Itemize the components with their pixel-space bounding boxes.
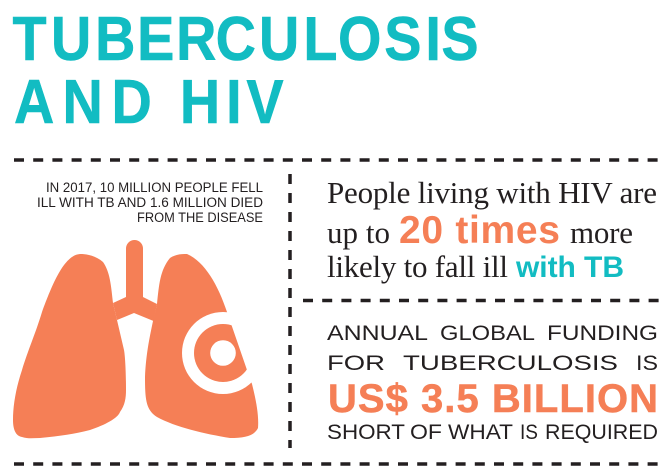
text: 20 times more likely: more (570, 215, 633, 250)
text: funding gap (327, 321, 658, 444)
text: funding gap: OF (410, 420, 442, 444)
text: TB statistics 2017: FROM THE DISEASE (137, 210, 263, 225)
text: funding gap: US$ 3.5 BILLION (328, 377, 658, 421)
TB target orange ring (194, 324, 252, 382)
text: TB statistics 2017: ILL WITH TB AND 1.6 MILLION DIED (37, 195, 263, 210)
icon: lungs with TB target (13, 240, 264, 438)
text: 20 times more likely: People living with HIV are (327, 175, 657, 210)
text: funding gap: GLOBAL (440, 321, 535, 345)
text: funding gap: IS (520, 420, 538, 444)
text: 20 times more likely: with TB (515, 251, 624, 284)
title: AND HIV (14, 68, 284, 137)
text: funding gap: ANNUAL (327, 321, 428, 345)
text: funding gap: SHORT (327, 420, 405, 444)
TB target centre (210, 340, 236, 366)
text: 20 times more likely: likely to fall ill (327, 249, 508, 284)
text: funding gap: TUBERCULOSIS (403, 351, 618, 375)
TB target white ring (182, 312, 264, 394)
text: funding gap: REQUIRED (545, 420, 658, 444)
text: TB statistics 2017 (37, 180, 263, 225)
text: funding gap: FUNDING (547, 321, 658, 345)
text: TB statistics 2017: IN 2017, 10 MILLION PEOPLE FELL (46, 180, 263, 195)
title: TUBERCULOSIS (12, 5, 479, 74)
text: funding gap: FOR (327, 351, 385, 375)
trachea and bronchi (113, 240, 157, 321)
text: 20 times more likely: 20 times (399, 209, 560, 252)
left lung (13, 254, 126, 438)
text: funding gap: IS (636, 351, 658, 375)
text: 20 times more likely: up to (327, 215, 390, 250)
text: 20 times more likely (327, 175, 657, 284)
text: funding gap: WHAT (448, 420, 513, 444)
title (12, 5, 479, 137)
right lung (145, 254, 258, 438)
